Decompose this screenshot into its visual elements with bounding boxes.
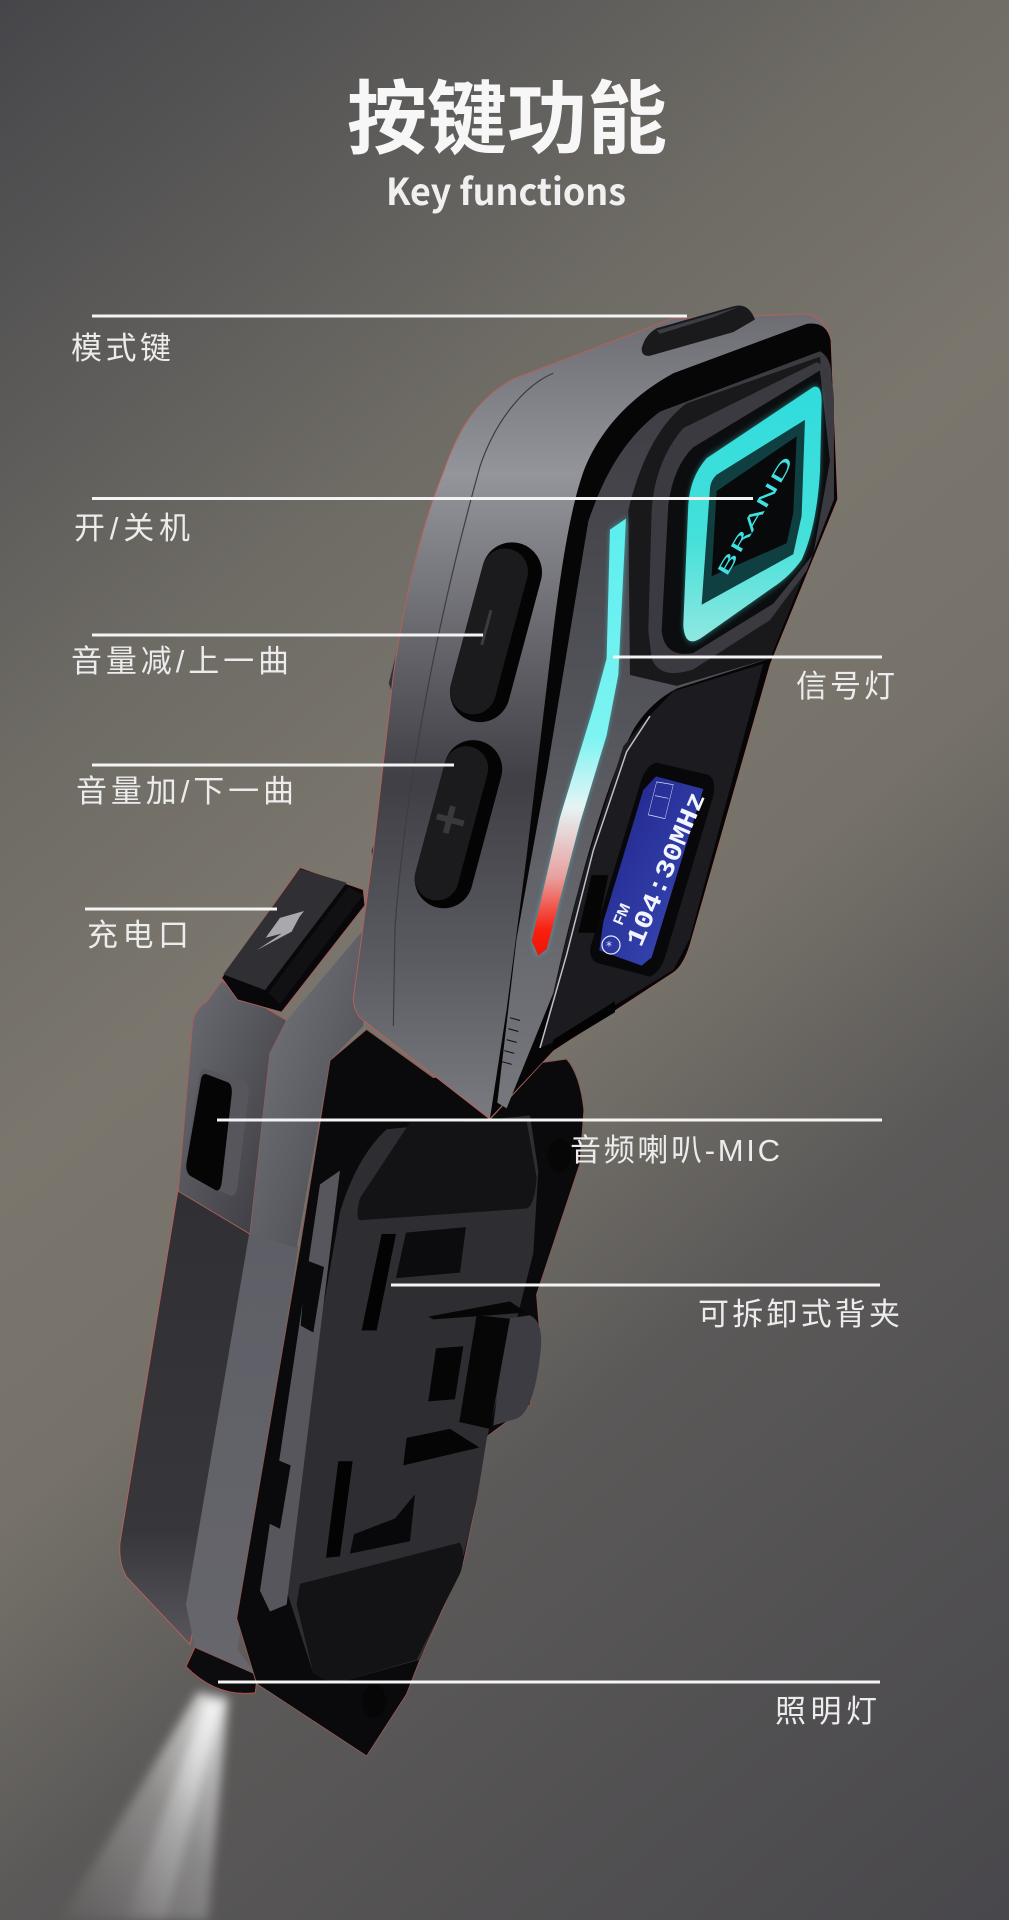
left face (120, 1188, 250, 1645)
title: 按键功能 (347, 75, 667, 164)
LCD FM label: FM (610, 901, 634, 928)
mode button (642, 305, 755, 356)
signal light glow (532, 519, 627, 955)
subtitle: Key functions (386, 162, 626, 216)
USB port (185, 1069, 249, 1196)
mounting holes (547, 1139, 571, 1172)
side strip (186, 1233, 298, 1675)
upper block left face (178, 981, 287, 1234)
ring inner (702, 420, 805, 605)
callout: speaker and mic: 音频喇叭-MIC (570, 1133, 780, 1168)
callout: signal light: 信号灯 (796, 669, 895, 704)
outer housing (353, 314, 837, 1119)
volume up button (408, 734, 509, 915)
icon: bluetooth on LCD: * (606, 939, 612, 953)
lamp housing (186, 1647, 257, 1693)
logo: BRAND: BRAND (713, 453, 797, 580)
black face (490, 324, 837, 1118)
back clip plate (260, 1116, 571, 1718)
plus sign (433, 803, 467, 837)
callout: detachable clip: 可拆卸式背夹 (698, 1297, 900, 1332)
housing seam (393, 373, 553, 1026)
callout: power: 开/关机 (74, 511, 190, 546)
charging port cover (222, 868, 365, 1012)
callout: volume up / next: 音量加/下一曲 (76, 774, 294, 809)
callout: flashlight: 照明灯 (775, 1694, 877, 1729)
bottom pad (297, 1543, 463, 1684)
back frame (237, 1029, 584, 1756)
cyan ring (683, 387, 822, 641)
upper block right face (250, 926, 367, 1248)
LCD bezel (590, 763, 714, 977)
LCD frequency readout: 104:30MHz (621, 788, 713, 951)
icon: lightning bolt (257, 911, 304, 950)
grey inner strip (497, 351, 833, 1108)
lower display face (540, 664, 763, 1048)
callout: mode key: 模式键 (71, 331, 171, 366)
callout: volume down / previous: 音量减/上一曲 (71, 644, 289, 679)
upper device body (353, 305, 837, 1119)
icon: battery (648, 782, 673, 819)
cyan glow (683, 387, 822, 641)
callout: charging port: 充电口 (87, 918, 189, 953)
clip slots (362, 1234, 396, 1330)
volume down button (443, 536, 549, 729)
icon: flashlight beam (60, 1692, 228, 1920)
side knob (388, 612, 422, 713)
lower device body (120, 868, 584, 1756)
speaker grille (502, 1018, 520, 1064)
icon: bluetooth on LCD (602, 936, 620, 954)
LCD screen (599, 776, 703, 966)
signal light bar (532, 519, 626, 956)
top pad (357, 1121, 537, 1220)
diamond light module (648, 362, 834, 673)
